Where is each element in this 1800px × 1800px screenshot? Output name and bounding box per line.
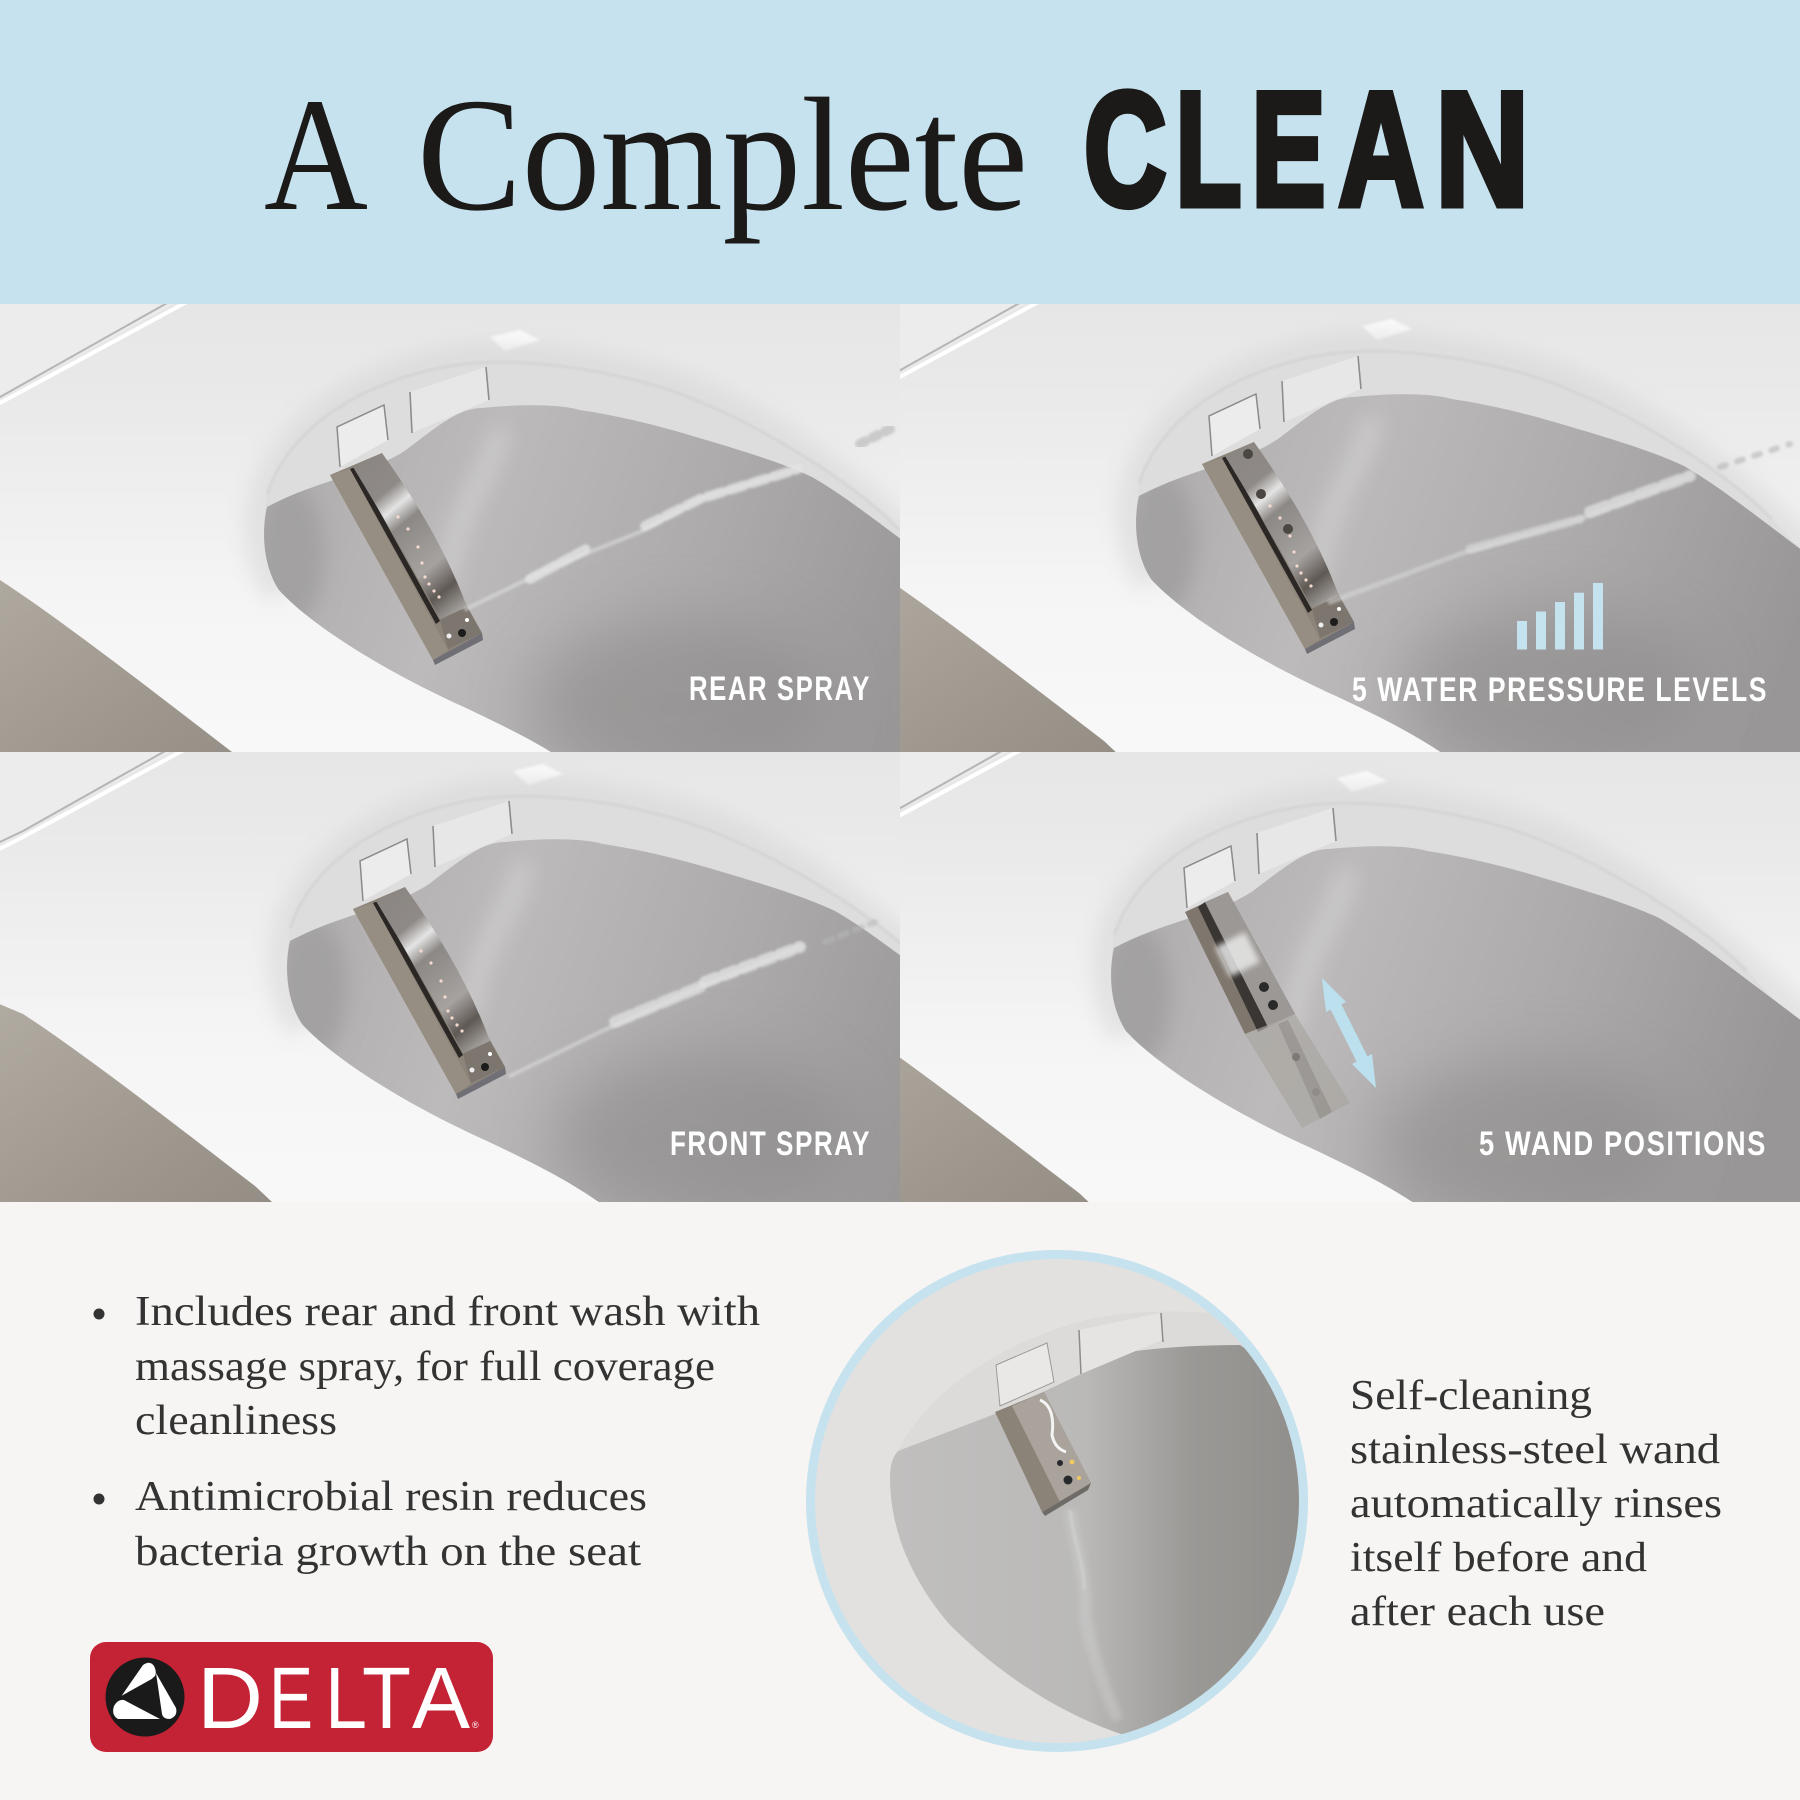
water jet (510, 922, 875, 1076)
wordmark: D (197, 1650, 263, 1747)
text block: self-cleaning description: after each use (1350, 1589, 1605, 1635)
title: A (1338, 59, 1424, 240)
photo circle: self-cleaning wand (800, 1240, 1320, 1770)
bullet 1: massage spray, for full coverage (135, 1344, 715, 1390)
title: E (1252, 59, 1326, 240)
bullet 1: cleanliness (135, 1398, 337, 1444)
text block: self-cleaning description: automatically rinses (1350, 1481, 1722, 1527)
bullet 2 (94, 1474, 647, 1575)
text block: feature bullets (94, 1289, 760, 1575)
wordmark: E (269, 1650, 313, 1747)
text block: self-cleaning description (1350, 1373, 1722, 1635)
water jet (1330, 444, 1790, 602)
wordmark: A (412, 1650, 470, 1747)
text block: self-cleaning description: itself before and (1350, 1535, 1647, 1581)
title (264, 59, 1529, 245)
bullet 1 (94, 1289, 760, 1444)
title: A (264, 66, 368, 245)
wordmark: ® (472, 1720, 479, 1730)
wordmark (197, 1650, 479, 1747)
text block: self-cleaning description: Self-cleaning (1350, 1373, 1592, 1419)
water jet (466, 429, 890, 609)
header band (0, 0, 1800, 304)
panel: rear spray (0, 304, 900, 752)
wordmark: L (325, 1650, 367, 1747)
icon: pressure bars (1517, 583, 1603, 650)
text block: self-cleaning description: stainless-steel wand (1350, 1427, 1720, 1473)
water stream (1070, 1510, 1118, 1720)
title: L (1176, 59, 1242, 240)
title: Complete (417, 66, 1028, 245)
title: C (1084, 59, 1166, 240)
bullet 2: bacteria growth on the seat (135, 1529, 641, 1575)
wand with ghost extension (1185, 892, 1350, 1128)
icon: double-headed arrow (1322, 978, 1376, 1088)
wand holes (1243, 449, 1293, 534)
label: FRONT SPRAY (670, 1125, 871, 1163)
panel: wand positions (900, 752, 1800, 1202)
logo: Delta (90, 1642, 493, 1752)
bullet 2: Antimicrobial resin reduces (135, 1474, 647, 1520)
panel: front spray (0, 752, 900, 1202)
wand tip (995, 1392, 1091, 1516)
panel: water pressure (900, 304, 1800, 752)
icon: Delta mark (106, 1658, 184, 1736)
bullet 1: Includes rear and front wash with (135, 1289, 760, 1335)
title: N (1436, 59, 1529, 240)
wordmark: T (362, 1650, 411, 1747)
label: REAR SPRAY (689, 670, 871, 708)
